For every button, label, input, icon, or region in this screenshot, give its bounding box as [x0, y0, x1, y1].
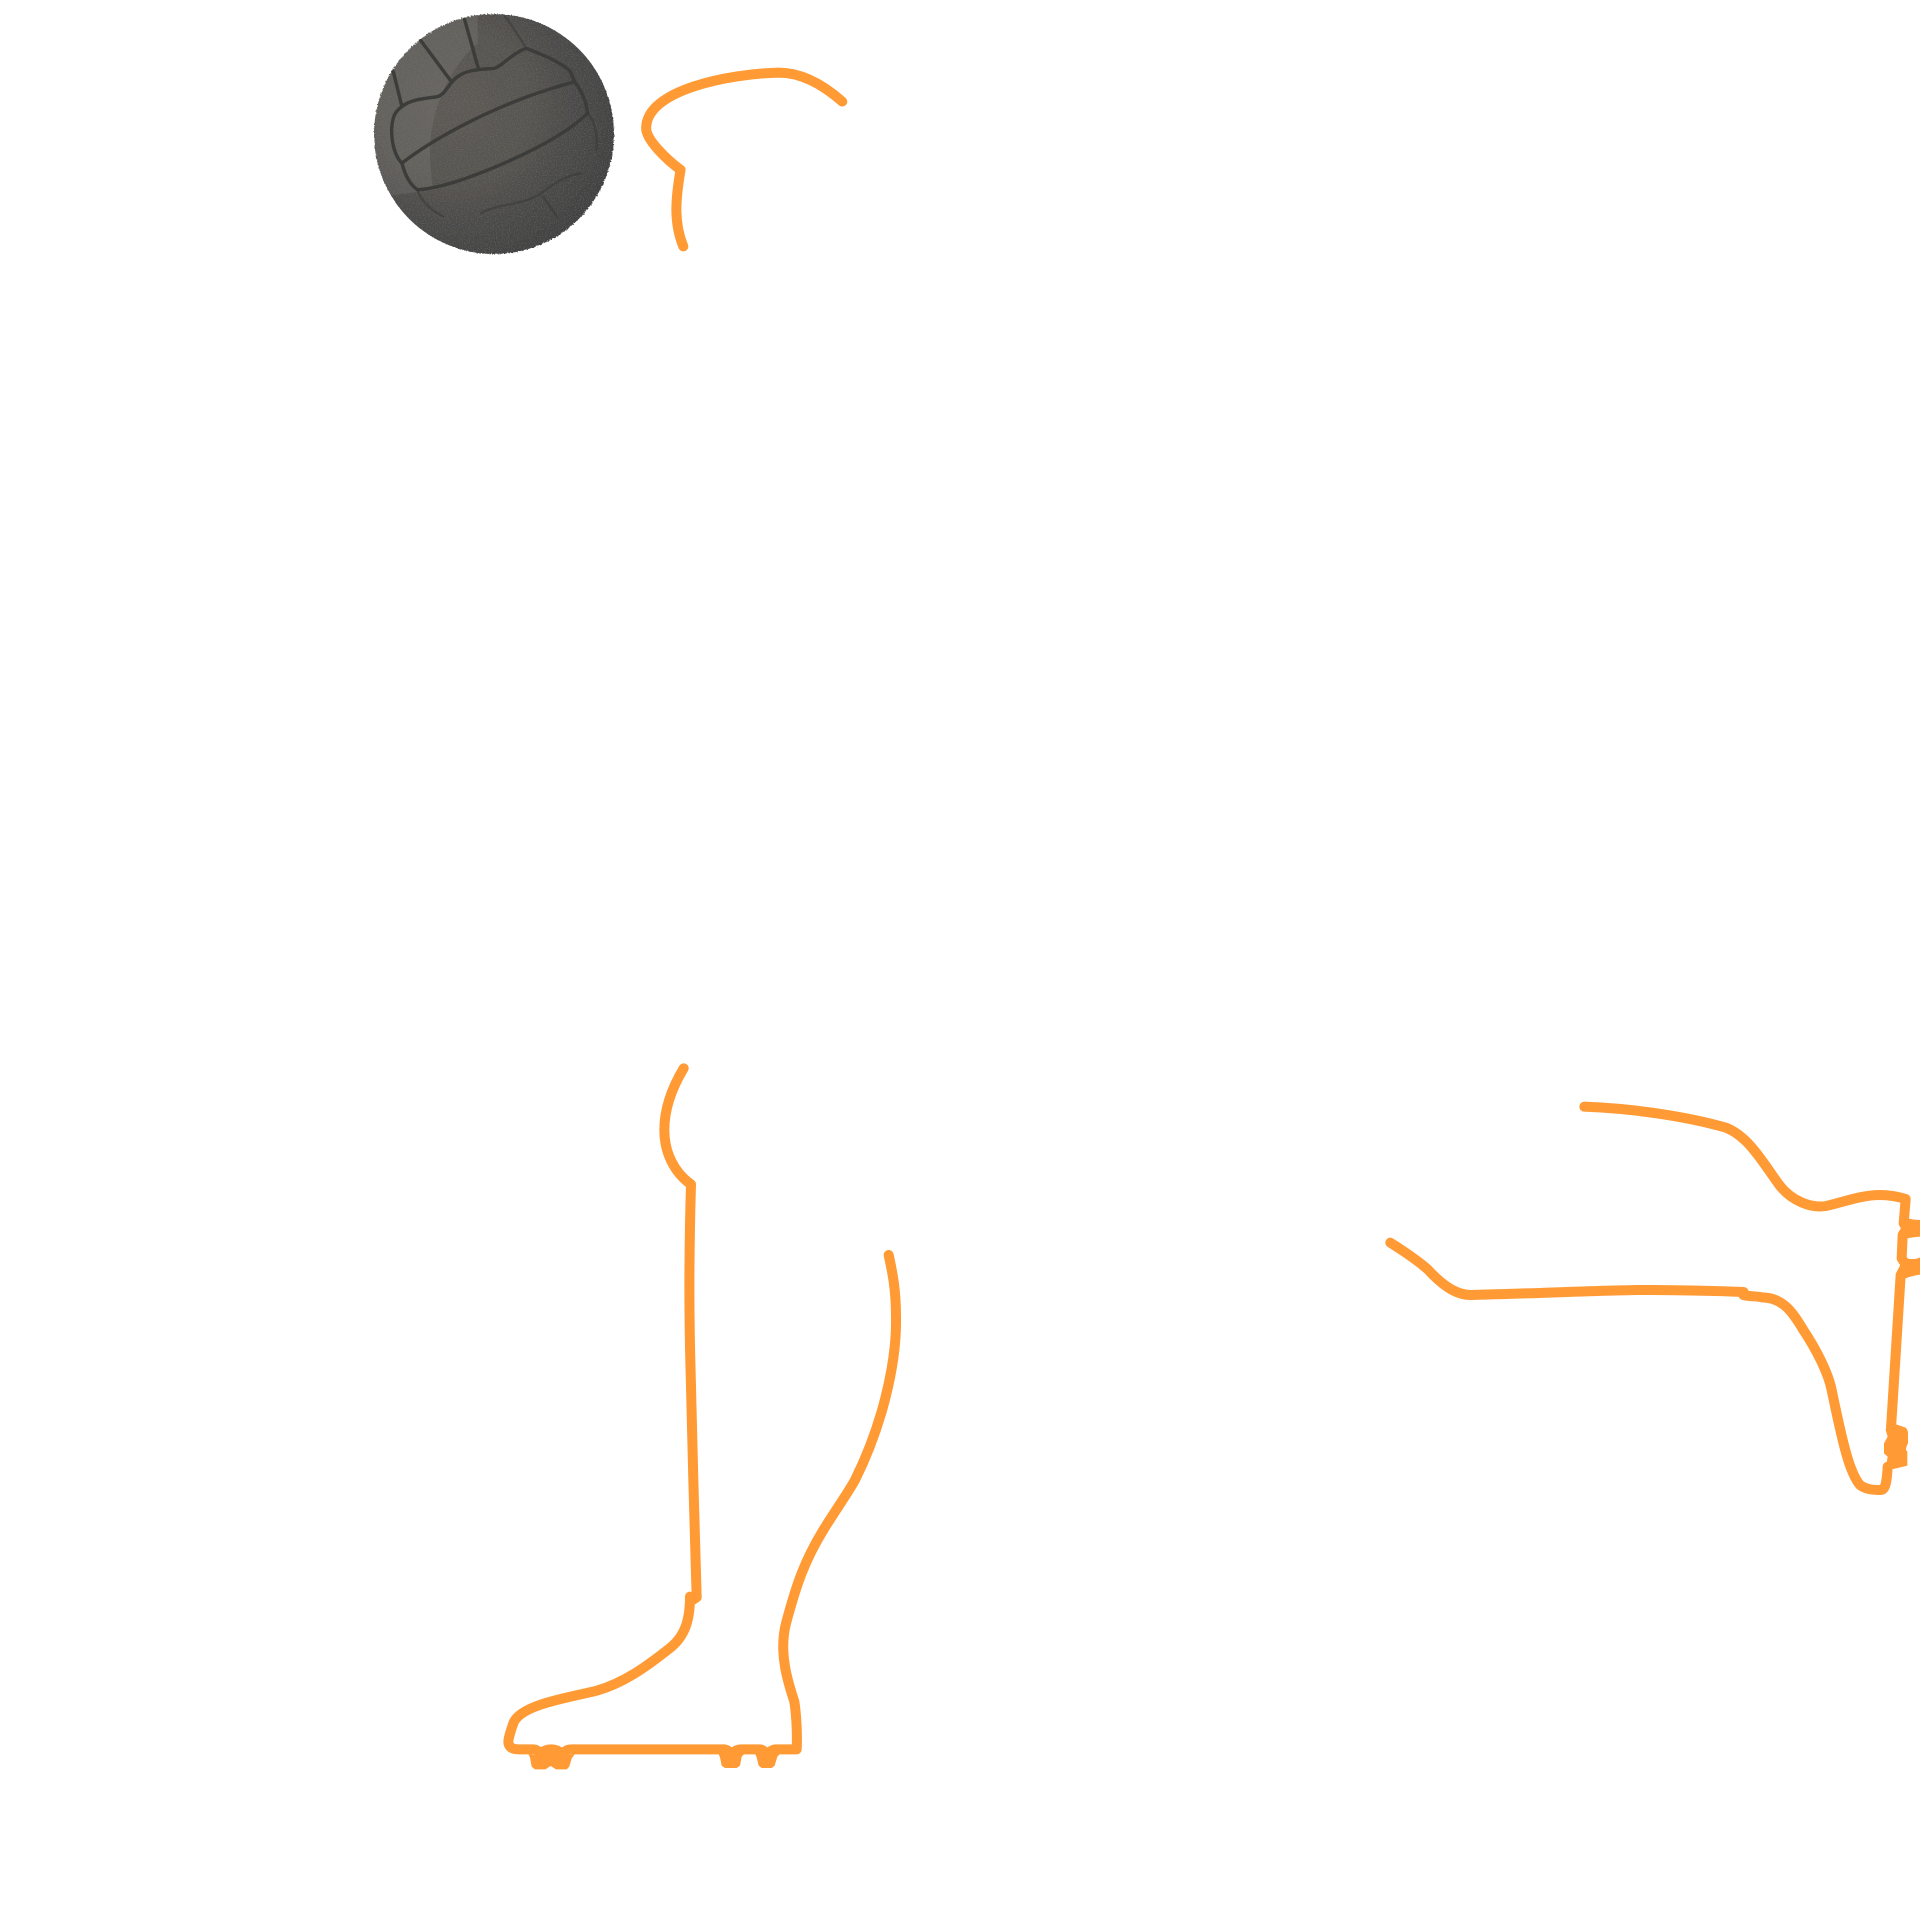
lower edge of raised leg	[1390, 1243, 1888, 1490]
boot studs	[528, 1751, 575, 1769]
boot studs on sole	[1900, 1215, 1920, 1241]
outline: standing leg and boot	[508, 1068, 896, 1769]
ball seams	[392, 17, 597, 216]
outline: head and neck	[646, 73, 842, 246]
illustration: footballer outline with ball	[374, 13, 1920, 1770]
back of leg and boot top	[508, 1068, 896, 1755]
outline: raised leg and boot	[1390, 1107, 1920, 1490]
icon: vintage football	[374, 13, 614, 254]
upper edge of raised leg	[1584, 1107, 1907, 1428]
